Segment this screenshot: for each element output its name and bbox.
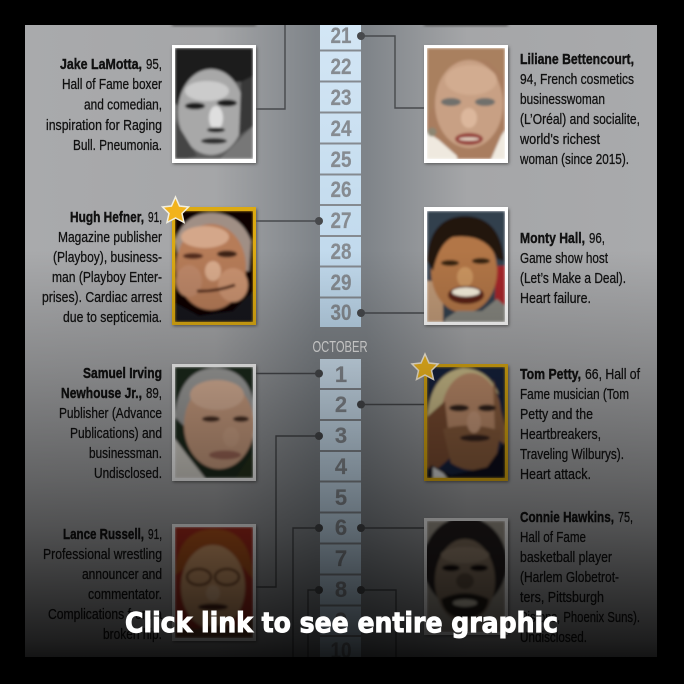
- timeline: September dates: 25: [330, 147, 352, 172]
- biography: Samuel Irving: [83, 365, 162, 382]
- biography: [520, 509, 640, 646]
- biography: basketball player: [520, 549, 612, 566]
- portrait: S. I. Newhouse: [175, 367, 254, 478]
- biography: [43, 526, 163, 643]
- timeline: September dates: [320, 23, 361, 327]
- timeline: October dates: 4: [335, 454, 348, 479]
- biography: announcer and: [82, 566, 162, 583]
- biography: 91,: [148, 209, 162, 226]
- biography: [46, 56, 162, 154]
- biography: broken hip.: [103, 626, 162, 643]
- biography: 94, French cosmetics: [520, 71, 634, 88]
- icon: gold star: [162, 197, 188, 222]
- portrait: Tom Petty: [427, 367, 505, 478]
- entry: Monty Hall: [424, 207, 626, 326]
- biography: Tom Petty,: [520, 366, 581, 383]
- biography: Publisher (Advance: [59, 405, 162, 422]
- timeline: September dates: 29: [330, 270, 352, 295]
- biography: (Harlem Globetrot-: [520, 569, 619, 586]
- timeline: October dates: 2: [335, 392, 347, 417]
- biography: ters, Pittsburgh: [520, 589, 604, 606]
- timeline: September dates: 22: [330, 54, 352, 79]
- biography: Magazine publisher: [58, 229, 162, 246]
- biography: Liliane Bettencourt,: [520, 51, 634, 68]
- photo shadows from the row above: [170, 25, 510, 28]
- biography: man (Playboy Enter-: [52, 269, 162, 286]
- biography: Connie Hawkins,: [520, 509, 614, 526]
- biography: Petty and the: [520, 406, 593, 423]
- timeline: October dates: 1: [335, 362, 347, 387]
- biography: Heart failure.: [520, 290, 591, 307]
- biography: [42, 209, 163, 326]
- timeline: October dates: 10: [330, 638, 352, 663]
- biography: woman (since 2015).: [519, 151, 629, 168]
- biography: businessman.: [89, 445, 162, 462]
- entry: Samuel Irving Newhouse Jr.: [59, 364, 257, 482]
- biography: Game show host: [520, 250, 609, 267]
- biography: 95,: [146, 56, 162, 73]
- timeline: October dates: 5: [335, 485, 347, 510]
- biography: 75,: [618, 509, 633, 526]
- portrait: Monty Hall: [427, 211, 505, 322]
- biography: (Let’s Make a Deal).: [520, 270, 626, 287]
- timeline: September dates: 24: [330, 116, 352, 141]
- biography: Newhouse Jr.,: [61, 385, 142, 402]
- biography: 96,: [589, 230, 605, 247]
- biography: Lance Russell,: [63, 526, 144, 543]
- timeline: October dates: 8: [335, 577, 347, 602]
- timeline: October dates: 3: [335, 423, 347, 448]
- biography: commentator.: [88, 586, 162, 603]
- entry: Hugh Hefner: [42, 197, 257, 326]
- portrait: Lance Russell: [175, 527, 253, 638]
- timeline: October dates: 6: [335, 515, 347, 540]
- biography: Hall of Fame boxer: [62, 76, 162, 93]
- biography: (L’Oréal) and socialite,: [520, 111, 640, 128]
- biography: 66, Hall of: [585, 366, 641, 383]
- timeline: October dates: 9: [335, 608, 347, 633]
- biography: [519, 51, 640, 168]
- biography: Hugh Hefner,: [70, 209, 144, 226]
- biography: Complications from a: [48, 606, 163, 623]
- biography: Undisclosed.: [520, 629, 587, 646]
- biography: [520, 230, 626, 307]
- biography: Hall of Fame: [520, 529, 586, 546]
- timeline: September dates: 23: [330, 85, 352, 110]
- biography: (Playboy), business-: [53, 249, 162, 266]
- timeline: October dates: 7: [335, 546, 347, 571]
- biography: prises). Cardiac arrest: [42, 289, 163, 306]
- biography: Monty Hall,: [520, 230, 585, 247]
- timeline: September dates: 27: [330, 208, 352, 233]
- icon: gold star: [412, 354, 438, 380]
- biography: Publications) and: [70, 425, 162, 442]
- portrait: Liliane Bettencourt: [427, 48, 505, 159]
- entry: Connie Hawkins: [423, 509, 640, 646]
- entry: Jake LaMotta: [46, 45, 257, 164]
- call to action: Click link to see entire graphic: [125, 606, 558, 639]
- biography: [520, 366, 641, 483]
- biography: 91,: [148, 526, 162, 543]
- biography: Undisclosed.: [94, 465, 162, 482]
- connector lines and date markers: [256, 25, 424, 657]
- portrait: Connie Hawkins: [427, 521, 505, 632]
- portrait: Jake LaMotta: [175, 48, 253, 159]
- month label: October: OCTOBER: [312, 339, 368, 356]
- timeline: September dates: 28: [330, 239, 352, 264]
- timeline: October dates: [320, 359, 361, 663]
- timeline: September dates: 21: [330, 23, 352, 48]
- timeline: September dates: 26: [330, 177, 352, 202]
- entry: Lance Russell: [43, 524, 257, 643]
- biography: Heart attack.: [520, 466, 591, 483]
- timeline: September dates: 30: [330, 300, 352, 325]
- biography: Heartbreakers,: [520, 426, 601, 443]
- entry: Tom Petty: [412, 354, 641, 483]
- entry: Liliane Bettencourt: [424, 45, 640, 168]
- biography: 89,: [146, 385, 162, 402]
- dark fade overlay: [25, 250, 657, 657]
- biography: [59, 365, 162, 482]
- biography: Traveling Wilburys).: [520, 446, 624, 463]
- biography: Professional wrestling: [43, 546, 162, 563]
- biography: due to septicemia.: [63, 309, 162, 326]
- biography: and comedian,: [84, 96, 162, 114]
- biography: inspiration for Raging: [46, 117, 162, 134]
- portrait: Hugh Hefner: [175, 211, 253, 322]
- biography: world's richest: [519, 131, 601, 148]
- biography: Jake LaMotta,: [60, 56, 142, 73]
- biography: Pistons, Phoenix Suns).: [520, 609, 640, 626]
- biography: Bull. Pneumonia.: [73, 137, 162, 154]
- biography: Fame musician (Tom: [520, 386, 629, 403]
- biography: businesswoman: [520, 91, 605, 108]
